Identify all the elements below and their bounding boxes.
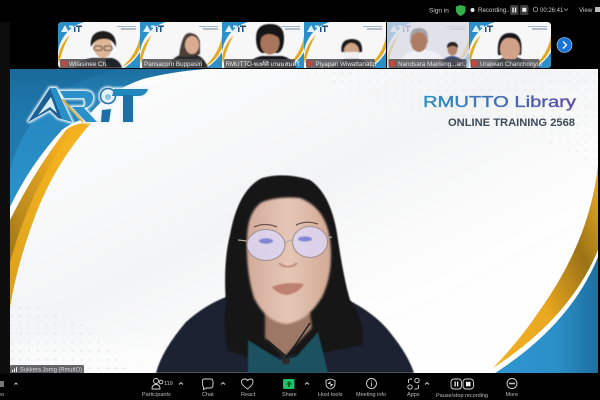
necklace: [267, 323, 310, 357]
presenter figure: [156, 175, 414, 373]
thumbnail: Uraiwan Chanchonyut: Uraiwan Chanchonyut: [480, 61, 542, 68]
control: share: Share: [282, 392, 297, 398]
icon: next page arrow button: [557, 38, 572, 52]
slide background: [10, 69, 598, 373]
eyebrows: [254, 222, 318, 227]
dot texture bottom left: [10, 306, 126, 370]
face: [247, 198, 331, 324]
left gold swoosh: [10, 123, 92, 307]
soft white wave: [10, 190, 598, 373]
thumbnail: RMUTTO participant: [222, 22, 304, 68]
glasses: [238, 226, 332, 260]
thumbnail: Nandsara Mairieng: Nandsara Mairieng...an...: [398, 61, 469, 68]
recording indicator: Recording...: [478, 7, 512, 14]
logo letter A: [28, 88, 72, 122]
thumbnail: Piyapan Wiwattanatip: [304, 22, 386, 68]
elapsed timer: [533, 7, 568, 14]
control: react: [241, 379, 256, 398]
control: meeting info: Meeting info: [356, 392, 386, 398]
name tag: presenter: Sukkera Jorng (RmuttO): [20, 367, 82, 373]
control: meeting info: [356, 378, 386, 398]
control: chat: Chat: [202, 392, 214, 398]
lips: [272, 283, 304, 295]
control: host tools: [305, 379, 343, 398]
control: participants: 119: [164, 381, 173, 387]
left blue swoosh: [10, 69, 205, 207]
left white stripe: [10, 122, 74, 207]
thumbnail: Piyapan Wiwattanatip: Piyapan Wiwattanatip: [316, 61, 377, 68]
eyes: [259, 236, 312, 244]
logo: ARiT: [28, 88, 148, 122]
control: chat: [202, 379, 225, 398]
participant thumbnail strip: [58, 22, 551, 68]
control: participants: Participants: [142, 392, 171, 398]
panel: shared presentation slide: [10, 69, 598, 374]
teal shirt: [248, 332, 328, 373]
logo letter T: [112, 89, 148, 122]
right gold swoosh: [493, 165, 598, 368]
thumbnail: Wilasinee: [58, 22, 140, 68]
logo letter R: [60, 91, 97, 122]
left margin beside the shared slide: [0, 22, 10, 374]
elapsed timer: 00:26:41: [540, 8, 564, 14]
dot texture top right: [300, 69, 598, 170]
bottom toolbar: [0, 378, 518, 399]
control: more: [506, 378, 518, 398]
left bright gold edge: [10, 130, 85, 307]
subtitle: online training: ONLINE TRAINING 2568: [448, 117, 575, 129]
right blue swoosh: [495, 257, 598, 373]
nose: [279, 263, 297, 267]
right white stripe: [493, 250, 598, 373]
thumbnail: Pansacorn Buppasiri: [140, 22, 222, 68]
title: RMUTTO Library: RMUTTO Library: [423, 94, 576, 111]
control: apps: Apps: [407, 392, 420, 398]
control: participants: [142, 378, 183, 398]
left darker blue band: [10, 78, 86, 170]
logo letter i with gear: [100, 88, 116, 122]
thumbnail: RMUTTO participant: RMUTTO-พงศ์ศิ เกษมสมศรี: [226, 60, 300, 68]
control: react: React: [241, 392, 256, 398]
control: share: [282, 379, 297, 398]
control: more: More: [506, 392, 518, 398]
thumbnail: Pansacorn Buppasiri: Pansacorn Buppasiri: [144, 61, 202, 68]
logo glow: [28, 88, 148, 122]
recording pause and stop buttons: [510, 5, 528, 15]
name tag: presenter: [10, 365, 84, 374]
view button: [579, 7, 600, 14]
thumbnail: Nandsara Mairieng: [387, 22, 469, 68]
control: pause/stop recording: Pause/stop recording: [436, 393, 488, 399]
neck: [265, 312, 312, 356]
thumbnail: Uraiwan Chanchonyut: [469, 22, 551, 68]
top status bar: [429, 5, 600, 16]
icon: green security shield: [456, 5, 466, 16]
hair: [224, 175, 363, 358]
control: video: [0, 381, 18, 398]
sign in link: Sign in: [429, 8, 449, 14]
thumbnail: Wilasinee: Wilasinee Ch.: [69, 61, 108, 68]
jacket: [156, 297, 414, 373]
control: host tools: Host tools: [318, 392, 343, 398]
control: apps: [407, 378, 429, 398]
control: pause/stop recording: [436, 379, 488, 399]
view button: View: [579, 7, 593, 14]
